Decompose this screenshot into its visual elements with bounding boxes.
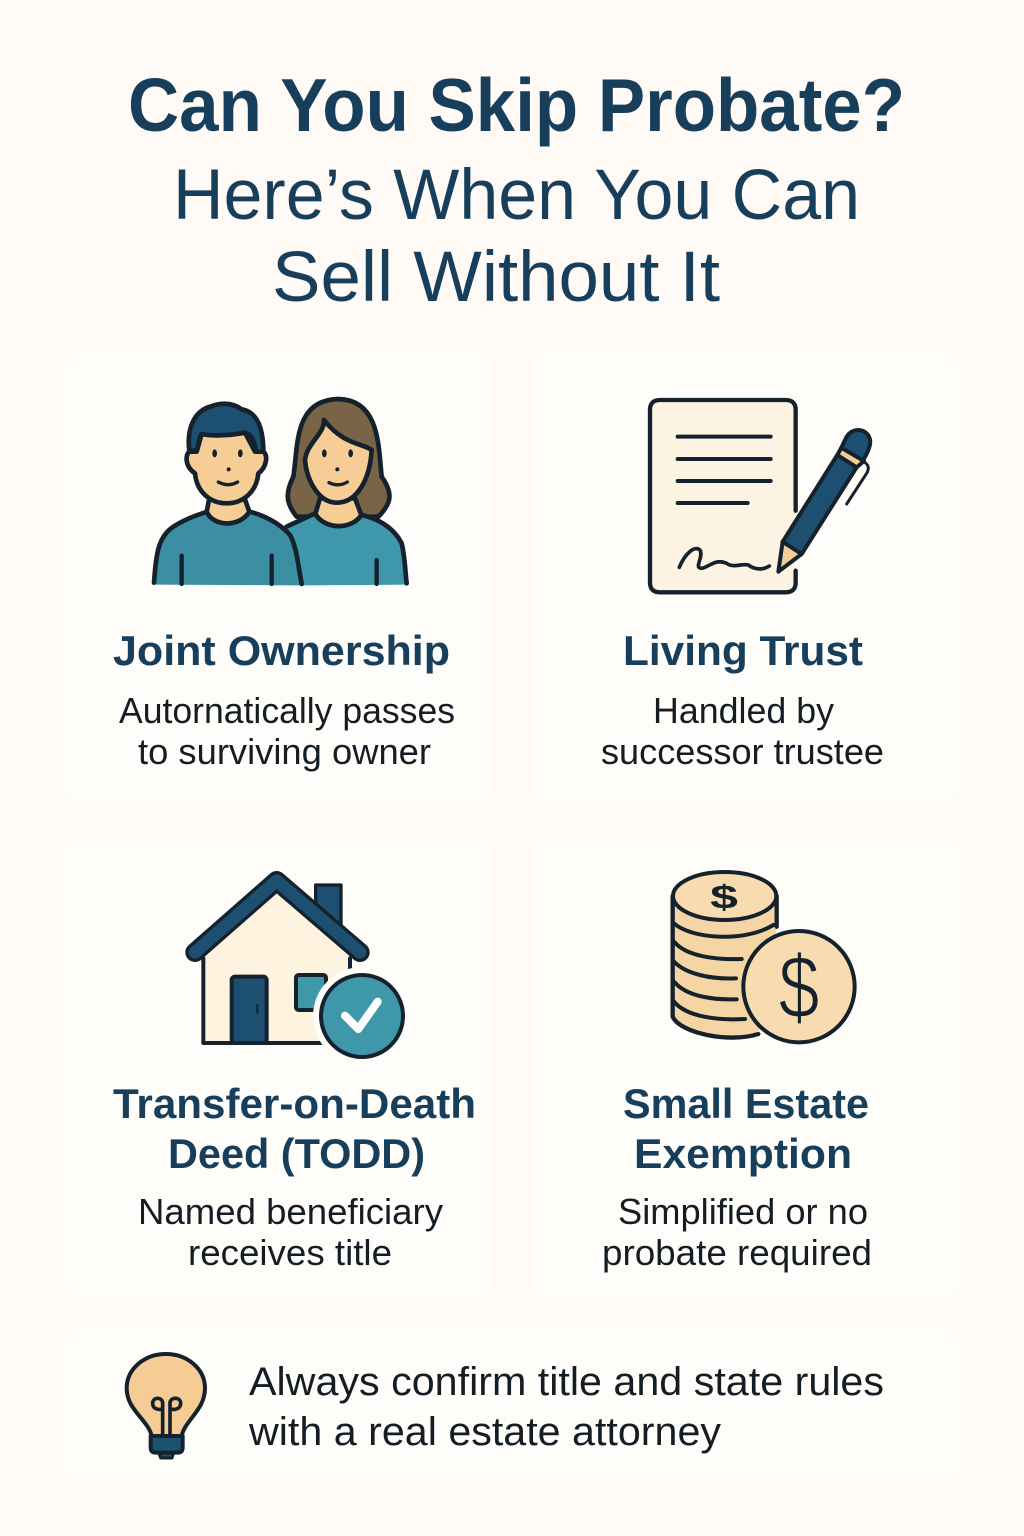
icon: two people <box>154 399 407 585</box>
description: small estate exemption <box>602 1191 872 1273</box>
icon: coin stack and dollar coin <box>673 872 855 1042</box>
title <box>128 63 905 317</box>
heading: living trust: Living Trust <box>623 627 863 674</box>
icon: coin stack and dollar coin: $ <box>710 880 738 917</box>
description: small estate exemption: Simplified or no <box>618 1191 868 1232</box>
description: transfer-on-death deed: receives title <box>188 1232 392 1273</box>
description: joint ownership <box>119 690 455 772</box>
icon: signed document and pen <box>650 400 870 592</box>
icon: house with check mark <box>195 881 411 1065</box>
heading: joint ownership: Joint Ownership <box>113 627 450 674</box>
description: living trust <box>601 690 884 772</box>
icon: light bulb <box>127 1354 205 1458</box>
title line: main question: Can You Skip Probate? <box>128 63 905 147</box>
heading: transfer-on-death deed: Transfer-on-Death <box>113 1080 476 1127</box>
callout text: with a real estate attorney <box>248 1410 721 1454</box>
description: joint ownership: to surviving owner <box>138 731 431 772</box>
panel: transfer-on-death deed <box>65 838 492 1298</box>
description: small estate exemption: probate required <box>602 1232 872 1273</box>
panel: joint ownership <box>65 353 492 804</box>
callout text: Always confirm title and state rules <box>249 1360 884 1404</box>
description: living trust: successor trustee <box>601 731 884 772</box>
panel: attorney tip <box>65 1328 959 1482</box>
panel: living trust <box>532 353 959 804</box>
icon: coin stack and dollar coin: $ <box>778 938 820 1038</box>
heading: small estate exemption: Small Estate <box>623 1080 869 1127</box>
description: joint ownership: Autornatically passes <box>119 690 455 731</box>
panel: small estate exemption <box>532 838 959 1298</box>
callout text <box>248 1360 884 1454</box>
description: transfer-on-death deed <box>138 1191 443 1273</box>
heading: small estate exemption <box>623 1080 869 1177</box>
description: transfer-on-death deed: Named beneficiary <box>138 1191 443 1232</box>
subtitle line two: Sell Without It <box>272 238 720 317</box>
description: living trust: Handled by <box>653 690 834 731</box>
heading: transfer-on-death deed <box>113 1080 476 1177</box>
heading: small estate exemption: Exemption <box>634 1130 852 1177</box>
heading: transfer-on-death deed: Deed (TODD) <box>168 1130 425 1177</box>
subtitle line one: Here’s When You Can <box>173 156 860 235</box>
